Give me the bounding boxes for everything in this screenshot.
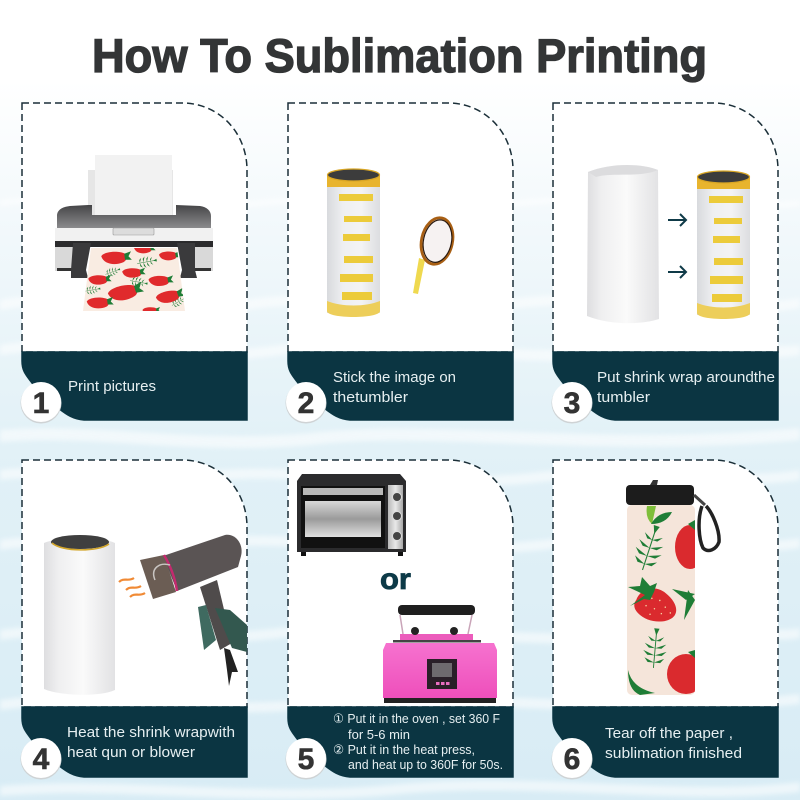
icon: heat waves [119, 578, 145, 597]
caption 4: heat qun or blower [67, 745, 195, 761]
title: How To Sublimation Printing [92, 29, 707, 82]
caption 3 [597, 370, 775, 406]
arrows [668, 214, 686, 278]
step number 2 [286, 382, 326, 424]
step number 2: 2 [298, 387, 314, 420]
step number 3: 3 [564, 387, 580, 420]
or label: or [380, 563, 411, 596]
caption 5: ① Put it in the oven , set 360 F [333, 711, 500, 726]
caption 5: for 5-6 min [348, 727, 410, 742]
panel: step 6 finished tumbler [552, 460, 778, 780]
icon: shrink wrap sleeve [587, 165, 659, 323]
icon: heat tape roll [413, 215, 457, 294]
caption 1: Print pictures [68, 379, 156, 395]
step number 5 [286, 738, 326, 780]
panel: step 1 print pictures [20, 103, 247, 424]
icon: toaster oven [297, 474, 406, 556]
caption 6: Tear off the paper , [605, 726, 733, 742]
step number 1: 1 [33, 387, 49, 420]
caption 2 [333, 370, 456, 406]
caption 2: thetumbler [333, 390, 408, 406]
panel: step 4 heat shrink wrap [20, 460, 247, 780]
icon: wrapped tumbler [44, 535, 115, 695]
caption 5 [333, 711, 503, 772]
panel: step 2 stick image [286, 103, 513, 424]
step number 5: 5 [298, 743, 314, 776]
step number 6 [552, 738, 592, 780]
icon: pink mug heat press [383, 605, 497, 703]
caption 3: tumbler [597, 390, 650, 406]
step number 1 [20, 382, 62, 424]
step number 6: 6 [564, 743, 580, 776]
icon: sublimated bottle [626, 480, 719, 695]
caption 6 [605, 726, 742, 762]
step number 4 [20, 738, 62, 780]
panel: step 3 shrink wrap [552, 103, 778, 424]
step number 3 [552, 382, 592, 424]
caption 3: Put shrink wrap aroundthe [597, 370, 775, 386]
icon: printer with strawberry print [55, 155, 213, 315]
caption 4 [67, 725, 235, 761]
step number 4: 4 [33, 743, 50, 776]
icon: hair dryer and glove [140, 535, 247, 686]
caption 5: and heat up to 360F for 50s. [348, 757, 503, 772]
icon: taped tumbler [327, 169, 380, 317]
panel: step 5 oven or heat press [286, 460, 513, 780]
caption 4: Heat the shrink wrapwith [67, 725, 235, 741]
caption 2: Stick the image on [333, 370, 456, 386]
caption 5: ② Put it in the heat press, [333, 742, 475, 757]
icon: taped tumbler [697, 171, 750, 319]
caption 6: sublimation finished [605, 746, 742, 762]
